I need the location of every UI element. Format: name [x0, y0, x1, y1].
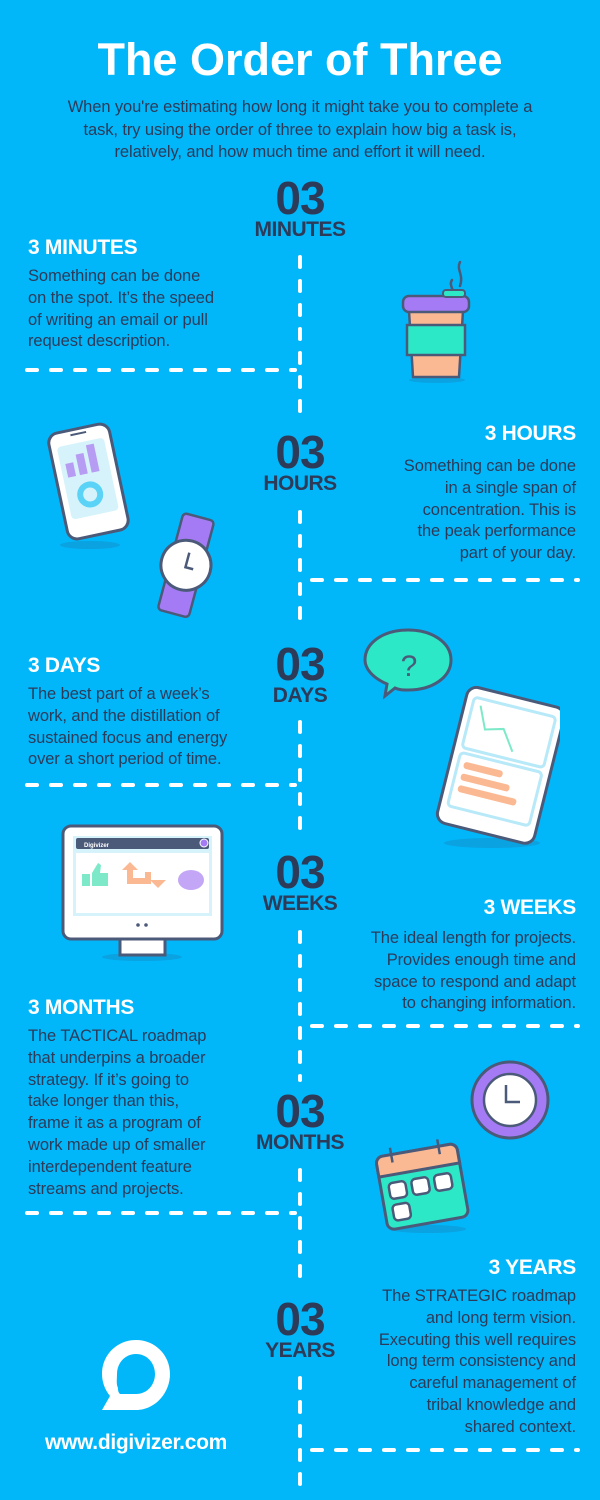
- block: 3 years: shared context.: [465, 1418, 576, 1436]
- block: 3 days: 3 DAYS: [28, 654, 100, 677]
- block: 3 hours: part of your day.: [460, 544, 576, 562]
- block: 3 months: strategy. If it’s going to: [28, 1071, 189, 1089]
- block: 3 months: 3 MONTHS: [28, 996, 134, 1019]
- marker: 03 days: [273, 638, 327, 707]
- marker: 03 weeks: WEEKS: [263, 892, 337, 915]
- subtitle: relatively, and how much time and effort it will need.: [115, 143, 485, 161]
- block: 3 weeks: space to respond and adapt: [374, 973, 576, 991]
- marker: 03 days: 03: [275, 638, 325, 690]
- block: 3 years: Executing this well requires: [379, 1331, 576, 1349]
- block: 3 months: frame it as a program of: [28, 1114, 201, 1132]
- block: 3 years: 3 YEARS: [489, 1256, 576, 1279]
- block: 3 months: [28, 996, 206, 1198]
- block: 3 days: The best part of a week’s: [28, 685, 210, 703]
- block: 3 weeks: to changing information.: [402, 994, 576, 1012]
- block: 3 years: and long term vision.: [426, 1309, 576, 1327]
- marker: 03 hours: [263, 426, 337, 495]
- block: 3 months: that underpins a broader: [28, 1049, 205, 1067]
- block: 3 minutes: of writing an email or pull: [28, 311, 208, 329]
- subtitle: When you're estimating how long it might take you to complete a: [68, 98, 532, 116]
- block: 3 days: [28, 654, 228, 768]
- marker: 03 minutes: 03: [275, 172, 325, 224]
- block: 3 weeks: [371, 896, 576, 1012]
- block: 3 hours: 3 HOURS: [485, 422, 576, 445]
- subtitle: task, try using the order of three to explain how big a task is,: [84, 120, 516, 138]
- logo: [102, 1340, 170, 1410]
- marker: 03 years: [265, 1293, 335, 1362]
- block: 3 hours: in a single span of: [445, 479, 576, 497]
- marker: 03 years: YEARS: [265, 1339, 335, 1362]
- block: 3 minutes: [28, 236, 214, 350]
- marker: 03 hours: 03: [275, 426, 325, 478]
- marker: 03 weeks: [262, 846, 337, 915]
- marker: 03 hours: HOURS: [263, 472, 337, 495]
- marker: 03 minutes: MINUTES: [254, 218, 346, 241]
- icon: desktop monitor: Digivizer: [84, 843, 110, 849]
- block: 3 years: The STRATEGIC roadmap: [382, 1287, 576, 1305]
- block: 3 weeks: The ideal length for projects.: [371, 929, 576, 947]
- marker: 03 days: DAYS: [273, 684, 327, 707]
- block: 3 weeks: Provides enough time and: [387, 951, 576, 969]
- icon: clock and calendar: [375, 1060, 550, 1233]
- icon: coffee cup: [402, 260, 470, 383]
- block: 3 weeks: 3 WEEKS: [484, 896, 576, 919]
- block: 3 months: interdependent feature: [28, 1158, 192, 1176]
- icon: speech bubble and tablet: ?: [401, 650, 417, 683]
- block: 3 months: work made up of smaller: [28, 1136, 205, 1154]
- block: 3 days: sustained focus and energy: [28, 729, 227, 747]
- block: 3 minutes: Something can be done: [28, 267, 200, 285]
- icon: phone and watch: [47, 422, 215, 618]
- block: 3 minutes: 3 MINUTES: [28, 236, 137, 259]
- marker: 03 minutes: [254, 172, 346, 241]
- block: 3 hours: the peak performance: [417, 522, 576, 540]
- block: 3 days: over a short period of time.: [28, 750, 221, 768]
- block: 3 years: long term consistency and: [387, 1352, 576, 1370]
- block: 3 hours: Something can be done: [404, 457, 576, 475]
- block: 3 months: streams and projects.: [28, 1180, 184, 1198]
- marker: 03 months: 03: [275, 1085, 325, 1137]
- marker: 03 weeks: 03: [275, 846, 325, 898]
- marker: 03 months: MONTHS: [256, 1131, 344, 1154]
- block: 3 hours: concentration. This is: [423, 501, 576, 519]
- block: 3 years: tribal knowledge and: [427, 1396, 576, 1414]
- block: 3 hours: [404, 422, 576, 562]
- marker: 03 years: 03: [275, 1293, 325, 1345]
- title: The Order of Three: [97, 34, 503, 85]
- icon: speech bubble and tablet: [364, 628, 560, 848]
- subtitle: [68, 98, 532, 161]
- block: 3 months: take longer than this,: [28, 1092, 179, 1110]
- marker: 03 months: [256, 1085, 344, 1154]
- icon: desktop monitor: [62, 824, 224, 961]
- website url: www.digivizer.com: [45, 1431, 227, 1454]
- block: 3 years: [379, 1256, 576, 1436]
- block: 3 days: work, and the distillation of: [28, 707, 220, 725]
- block: 3 minutes: request description.: [28, 332, 170, 350]
- block: 3 minutes: on the spot. It’s the speed: [28, 289, 214, 307]
- block: 3 months: The TACTICAL roadmap: [28, 1027, 206, 1045]
- block: 3 years: careful management of: [409, 1374, 576, 1392]
